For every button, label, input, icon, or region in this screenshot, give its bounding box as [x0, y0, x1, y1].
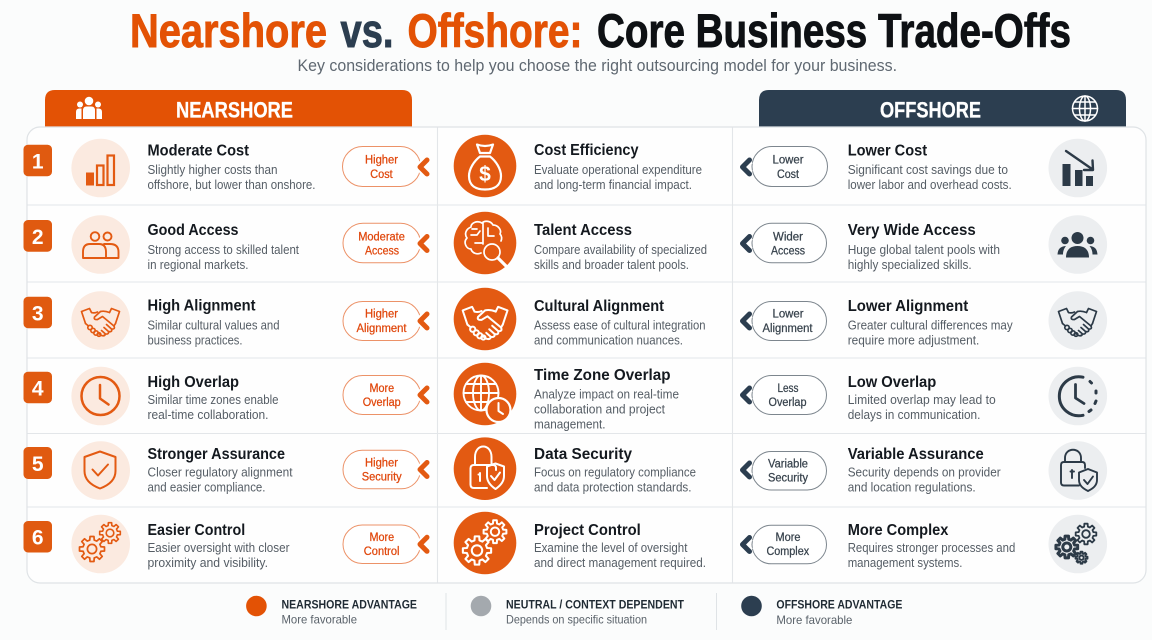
- text: talent access: skills and broader talent pools.: [534, 258, 689, 272]
- pill: less overlap: Less: [778, 383, 799, 395]
- legend: neutral: NEUTRAL / CONTEXT DEPENDENT: [506, 599, 684, 611]
- legend: [246, 593, 903, 630]
- comparison card: [27, 127, 1146, 583]
- pill: less overlap: Overlap: [768, 397, 806, 409]
- text: project control: Examine the level of oversight: [534, 541, 688, 555]
- row 2: talent: [24, 212, 1107, 274]
- text: easier control: proximity and visibility.: [148, 556, 268, 570]
- text: talent access: [534, 222, 707, 272]
- row 5: security: [24, 437, 1107, 500]
- text: very wide access: Very Wide Access: [848, 222, 976, 239]
- pill: lower alignment: Alignment: [762, 323, 813, 335]
- badge 4: [24, 372, 52, 403]
- title: Nearshore: [130, 5, 327, 58]
- icon: lock and shield: [454, 437, 516, 500]
- pill: higher security: [343, 450, 427, 489]
- badge 2: [24, 220, 52, 252]
- badge 5: 5: [32, 453, 44, 476]
- header: offshore: OFFSHORE: [880, 98, 981, 122]
- pill: lower cost: [742, 146, 828, 186]
- text: project control: and direct management required.: [534, 556, 706, 570]
- icon: two people: [71, 215, 130, 274]
- icon: globe and clock: [454, 363, 516, 425]
- pill: more overlap: More: [370, 383, 394, 395]
- text: data security: Data Security: [534, 446, 632, 463]
- text: project control: [534, 522, 706, 570]
- text: cultural alignment: [534, 298, 706, 348]
- icon: handshake on grey: [1048, 291, 1107, 350]
- pill: lower cost: Lower: [772, 154, 804, 166]
- text: lower cost: Significant cost savings due to: [848, 163, 1008, 177]
- pill: higher security: Security: [362, 472, 402, 484]
- text: cost efficiency: Evaluate operational expenditure: [534, 163, 702, 177]
- text: variable assurance: Security depends on provider: [848, 466, 1001, 480]
- icon: gears on grey: [1048, 515, 1107, 573]
- text: easier control: Easier Control: [148, 522, 245, 539]
- icon: rising bars: [71, 139, 130, 197]
- text: lower alignment: Greater cultural differences may: [848, 318, 1013, 332]
- text: more complex: [848, 522, 1015, 570]
- text: more complex: More Complex: [848, 522, 948, 539]
- text: lower cost: [848, 143, 1012, 192]
- badge 5: [24, 447, 52, 479]
- text: cost efficiency: Cost Efficiency: [534, 142, 639, 159]
- header: offshore: [759, 90, 1126, 128]
- pill: variable security: Security: [768, 473, 808, 485]
- text: very wide access: [848, 222, 1000, 272]
- text: stronger assurance: Closer regulatory alignment: [148, 466, 293, 480]
- icon: lock and shield on grey: [1048, 441, 1107, 500]
- legend: nearshore advantage: More favorable: [282, 612, 357, 626]
- pill: lower alignment: [742, 302, 826, 340]
- text: low overlap: Low Overlap: [848, 374, 937, 391]
- pill: wider access: Wider: [773, 231, 803, 243]
- title: vs.: [340, 5, 394, 58]
- badge 6: [24, 521, 52, 552]
- title: Offshore:: [408, 5, 582, 58]
- icon: gears on orange: [454, 512, 516, 574]
- legend: neutral: [471, 596, 684, 626]
- text: time zone overlap: [534, 367, 679, 432]
- text: talent access: Compare availability of specialized: [534, 243, 707, 257]
- text: cultural alignment: Assess ease of cultural integration: [534, 318, 706, 332]
- text: high overlap: [148, 374, 279, 422]
- icon: falling bars: [1048, 139, 1107, 197]
- text: very wide access: highly specialized skills.: [848, 258, 972, 272]
- pill: less overlap: [742, 376, 826, 414]
- text: data security: Focus on regulatory compliance: [534, 466, 696, 480]
- text: low overlap: Limited overlap may lead to: [848, 393, 996, 407]
- subtitle: Key considerations to help you choose the right outsourcing model for your business.: [298, 56, 897, 75]
- pill: moderate access: Access: [365, 246, 399, 258]
- row 6: control: [24, 512, 1107, 574]
- text: lower alignment: [848, 298, 1013, 348]
- pill: higher alignment: Higher: [365, 309, 398, 321]
- icon: clock: [71, 367, 130, 425]
- text: good access: Good Access: [148, 222, 239, 239]
- pill: higher security: Higher: [365, 458, 398, 470]
- text: lower alignment: require more adjustment.: [848, 334, 979, 348]
- text: variable assurance: [848, 446, 1001, 495]
- text: time zone overlap: Analyze impact on real-time: [534, 388, 679, 402]
- pill: variable security: [742, 452, 826, 490]
- legend: offshore advantage: OFFSHORE ADVANTAGE: [776, 599, 903, 611]
- badge 2: 2: [32, 226, 44, 249]
- legend: offshore advantage: [741, 596, 903, 627]
- icon: gears: [71, 515, 130, 573]
- text: data security: and data protection standards.: [534, 481, 692, 495]
- row 4: time zone: [24, 363, 1107, 432]
- text: high overlap: High Overlap: [148, 374, 239, 391]
- text: time zone overlap: collaboration and project: [534, 402, 666, 416]
- text: easier control: Easier oversight with closer: [148, 541, 290, 555]
- icon: people: [76, 97, 102, 119]
- pill: wider access: Access: [771, 246, 805, 258]
- text: good access: [148, 222, 299, 272]
- pill: higher cost: Higher: [365, 154, 398, 166]
- pill: more overlap: Overlap: [363, 397, 401, 409]
- icon: money bag: $: [479, 163, 491, 186]
- pill: more overlap: [343, 376, 427, 414]
- pill: more control: [343, 525, 427, 564]
- text: lower cost: lower labor and overhead costs.: [848, 178, 1012, 192]
- badge 1: 1: [32, 150, 44, 173]
- icon: brain and magnifier: [454, 212, 516, 274]
- pill: more control: More: [370, 532, 394, 544]
- pill: higher alignment: Alignment: [356, 323, 407, 335]
- text: high overlap: Similar time zones enable: [148, 393, 279, 407]
- row 1: cost: [24, 135, 1107, 197]
- pill: more complex: More: [776, 532, 800, 544]
- text: high alignment: [148, 298, 280, 348]
- icon: handshake: [71, 291, 130, 350]
- text: more complex: management systems.: [848, 556, 962, 570]
- badge 6: 6: [32, 526, 44, 549]
- pill: lower alignment: Lower: [772, 309, 804, 321]
- text: stronger assurance: and easier compliance.: [148, 481, 266, 495]
- legend: offshore advantage: More favorable: [776, 613, 853, 627]
- text: cost efficiency: [534, 142, 702, 192]
- text: lower alignment: Lower Alignment: [848, 298, 969, 315]
- text: easier control: [148, 522, 290, 570]
- pill: higher cost: [342, 146, 427, 186]
- pill: more complex: [742, 525, 826, 564]
- text: stronger assurance: Stronger Assurance: [148, 446, 285, 463]
- pill: moderate access: [343, 223, 427, 263]
- text: project control: Project Control: [534, 522, 641, 539]
- text: more complex: Requires stronger processes and: [848, 541, 1015, 555]
- pill: moderate access: Moderate: [358, 231, 405, 243]
- text: time zone overlap: Time Zone Overlap: [534, 367, 671, 384]
- legend: nearshore advantage: NEARSHORE ADVANTAGE: [282, 599, 417, 611]
- icon: clock with dashed arc: [1048, 367, 1107, 425]
- text: stronger assurance: [148, 446, 293, 495]
- badge 1: [24, 145, 52, 176]
- text: good access: Strong access to skilled talent: [148, 243, 299, 257]
- icon: shield check: [71, 441, 130, 500]
- text: very wide access: Huge global talent pools with: [848, 243, 1000, 257]
- text: data security: [534, 446, 696, 495]
- pill: lower cost: Cost: [777, 169, 800, 181]
- text: variable assurance: and location regulations.: [848, 481, 976, 495]
- text: good access: in regional markets.: [148, 258, 248, 272]
- text: time zone overlap: management.: [534, 418, 606, 432]
- text: low overlap: delays in communication.: [848, 408, 980, 422]
- text: high alignment: High Alignment: [148, 298, 256, 315]
- text: cultural alignment: Cultural Alignment: [534, 298, 665, 315]
- header: nearshore: [45, 90, 412, 128]
- text: high alignment: business practices.: [148, 334, 242, 348]
- badge 3: 3: [32, 303, 44, 326]
- text: moderate cost: Moderate Cost: [148, 143, 250, 160]
- icon: money bag: [454, 135, 516, 197]
- text: moderate cost: offshore, but lower than onshore.: [148, 178, 316, 192]
- badge 4: 4: [32, 378, 44, 401]
- text: moderate cost: Slightly higher costs than: [148, 163, 278, 177]
- text: cost efficiency: and long-term financial impact.: [534, 178, 692, 192]
- pill: higher cost: Cost: [370, 169, 393, 181]
- pill: more complex: Complex: [766, 546, 809, 558]
- icon: team: [1048, 215, 1107, 274]
- header: nearshore: NEARSHORE: [176, 98, 293, 122]
- text: cultural alignment: and communication nuances.: [534, 334, 683, 348]
- row 3: culture: [24, 288, 1107, 350]
- legend: neutral: Depends on specific situation: [506, 612, 647, 626]
- text: low overlap: [848, 374, 996, 422]
- icon: handshake on orange: [454, 288, 516, 350]
- legend: nearshore advantage: [246, 596, 417, 626]
- pill: higher alignment: [343, 302, 427, 340]
- text: variable assurance: Variable Assurance: [848, 446, 984, 463]
- text: high alignment: Similar cultural values and: [148, 318, 280, 332]
- badge 3: [24, 297, 52, 328]
- text: moderate cost: [148, 143, 316, 192]
- pill: variable security: Variable: [768, 459, 808, 471]
- pill: more control: Control: [364, 546, 400, 558]
- text: high overlap: real-time collaboration.: [148, 408, 268, 422]
- text: talent access: Talent Access: [534, 222, 632, 239]
- pill: wider access: [742, 223, 826, 263]
- icon: globe: [1072, 96, 1098, 121]
- text: lower cost: Lower Cost: [848, 143, 928, 160]
- title: [130, 5, 1071, 58]
